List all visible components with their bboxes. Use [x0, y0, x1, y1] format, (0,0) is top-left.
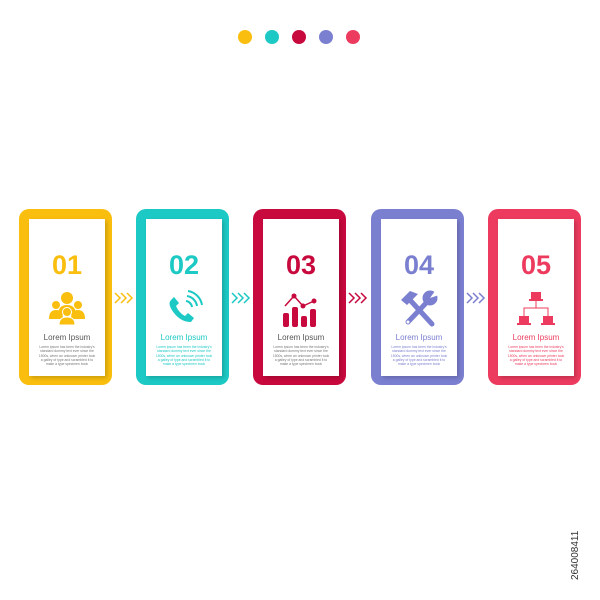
card 03: Lorem Ipsum	[278, 333, 324, 342]
arrow 3	[348, 292, 367, 304]
icon: phone	[170, 290, 203, 322]
arrow 2	[232, 292, 250, 304]
card 04: 04	[404, 250, 434, 280]
arrow 4	[466, 292, 485, 304]
icon: tools	[401, 290, 438, 326]
card 05: 05	[521, 250, 551, 280]
icon: chart	[283, 294, 316, 327]
card 03: 03	[286, 250, 316, 280]
card 03: Lorem ipsum has been the industry's standard dummy text ever since the 1500s, when an unknown printer took a galley of type and scrambled it to make a type specimen book	[273, 345, 329, 366]
card 01	[19, 209, 112, 385]
card 01: Lorem Ipsum	[44, 333, 90, 342]
card 02: Lorem ipsum has been the industry's standard dummy text ever since the 1500s, when an unknown printer took a galley of type and scrambled it to make a type specimen book	[156, 345, 212, 366]
card 03	[253, 209, 346, 385]
card 01: Lorem ipsum has been the industry's standard dummy text ever since the 1500s, when an unknown printer took a galley of type and scrambled it to make a type specimen book	[39, 345, 95, 366]
icon: network	[517, 292, 555, 325]
card 02: 02	[169, 250, 199, 280]
card 04: Lorem Ipsum	[396, 333, 442, 342]
stock id: 264008411	[570, 531, 581, 580]
card 04	[371, 209, 464, 385]
card 01: 01	[52, 250, 82, 280]
color dots	[238, 30, 360, 44]
card 02	[136, 209, 229, 385]
card 05	[488, 209, 581, 385]
card 02: Lorem Ipsum	[161, 333, 207, 342]
card 04: Lorem ipsum has been the industry's standard dummy text ever since the 1500s, when an unknown printer took a galley of type and scrambled it to make a type specimen book	[391, 345, 447, 366]
card 05: Lorem Ipsum	[513, 333, 559, 342]
arrow 1	[114, 292, 133, 304]
card 05: Lorem ipsum has been the industry's standard dummy text ever since the 1500s, when an unknown printer took a galley of type and scrambled it to make a type specimen book	[508, 345, 564, 366]
icon: people	[49, 292, 85, 324]
